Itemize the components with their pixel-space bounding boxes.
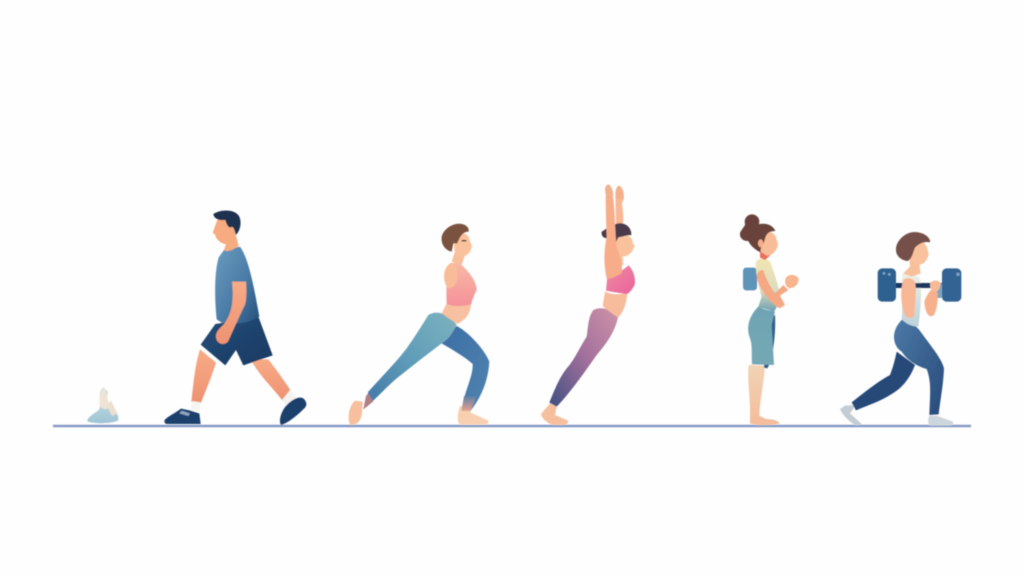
figure 4: woman standing with fists raised xyxy=(740,214,799,425)
figure 3: woman reaching upward xyxy=(541,185,635,425)
figure 5: woman lunging with dumbbell xyxy=(840,232,961,426)
icon: water splash xyxy=(87,387,118,423)
ground line xyxy=(53,425,971,427)
figure 1: walking man with water splash xyxy=(87,210,306,425)
icon: blue weight behind back xyxy=(743,268,757,290)
icon: dumbbell xyxy=(878,268,961,302)
figure 2: woman in a lunge xyxy=(349,224,489,425)
man body xyxy=(164,210,306,425)
